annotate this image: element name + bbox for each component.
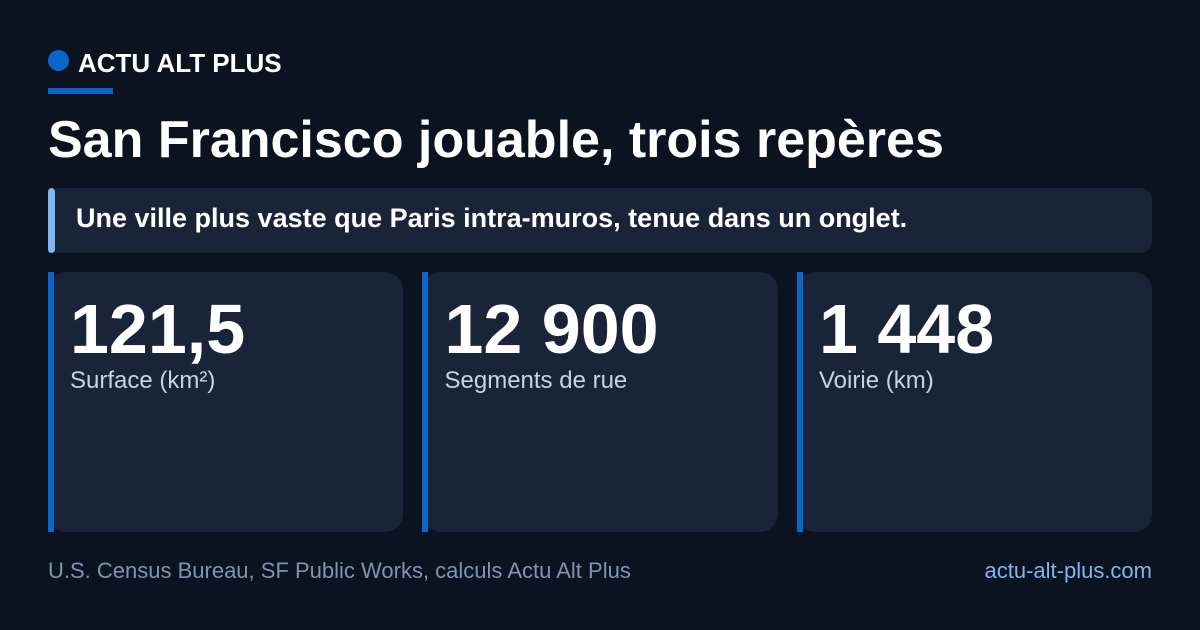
brand dot [48, 50, 69, 71]
title: San Francisco jouable, trois repères [48, 111, 944, 169]
panel: stat voirie [797, 272, 1152, 532]
brand underline [48, 88, 113, 94]
stat label: surface: Surface (km²) [70, 367, 215, 394]
panel: subtitle [48, 188, 1152, 253]
brand name: ACTU ALT PLUS [78, 48, 282, 78]
panel: stat segments [422, 272, 778, 532]
stat number: voirie: 1 448 [819, 290, 994, 368]
site url: actu-alt-plus.com [984, 558, 1152, 583]
subtitle text: Une ville plus vaste que Paris intra-muros, tenue dans un onglet. [76, 203, 907, 233]
stat label: voirie: Voirie (km) [819, 367, 934, 394]
accent bar: surface [48, 272, 54, 532]
accent bar: segments [422, 272, 428, 532]
panel: stat surface [48, 272, 403, 532]
subtitle accent bar [48, 188, 54, 253]
source text: U.S. Census Bureau, SF Public Works, calculs Actu Alt Plus [48, 558, 631, 583]
accent bar: voirie [797, 272, 803, 532]
stat number: surface: 121,5 [70, 290, 245, 368]
stat label: segments: Segments de rue [444, 367, 627, 394]
stat number: segments: 12 900 [444, 290, 659, 368]
